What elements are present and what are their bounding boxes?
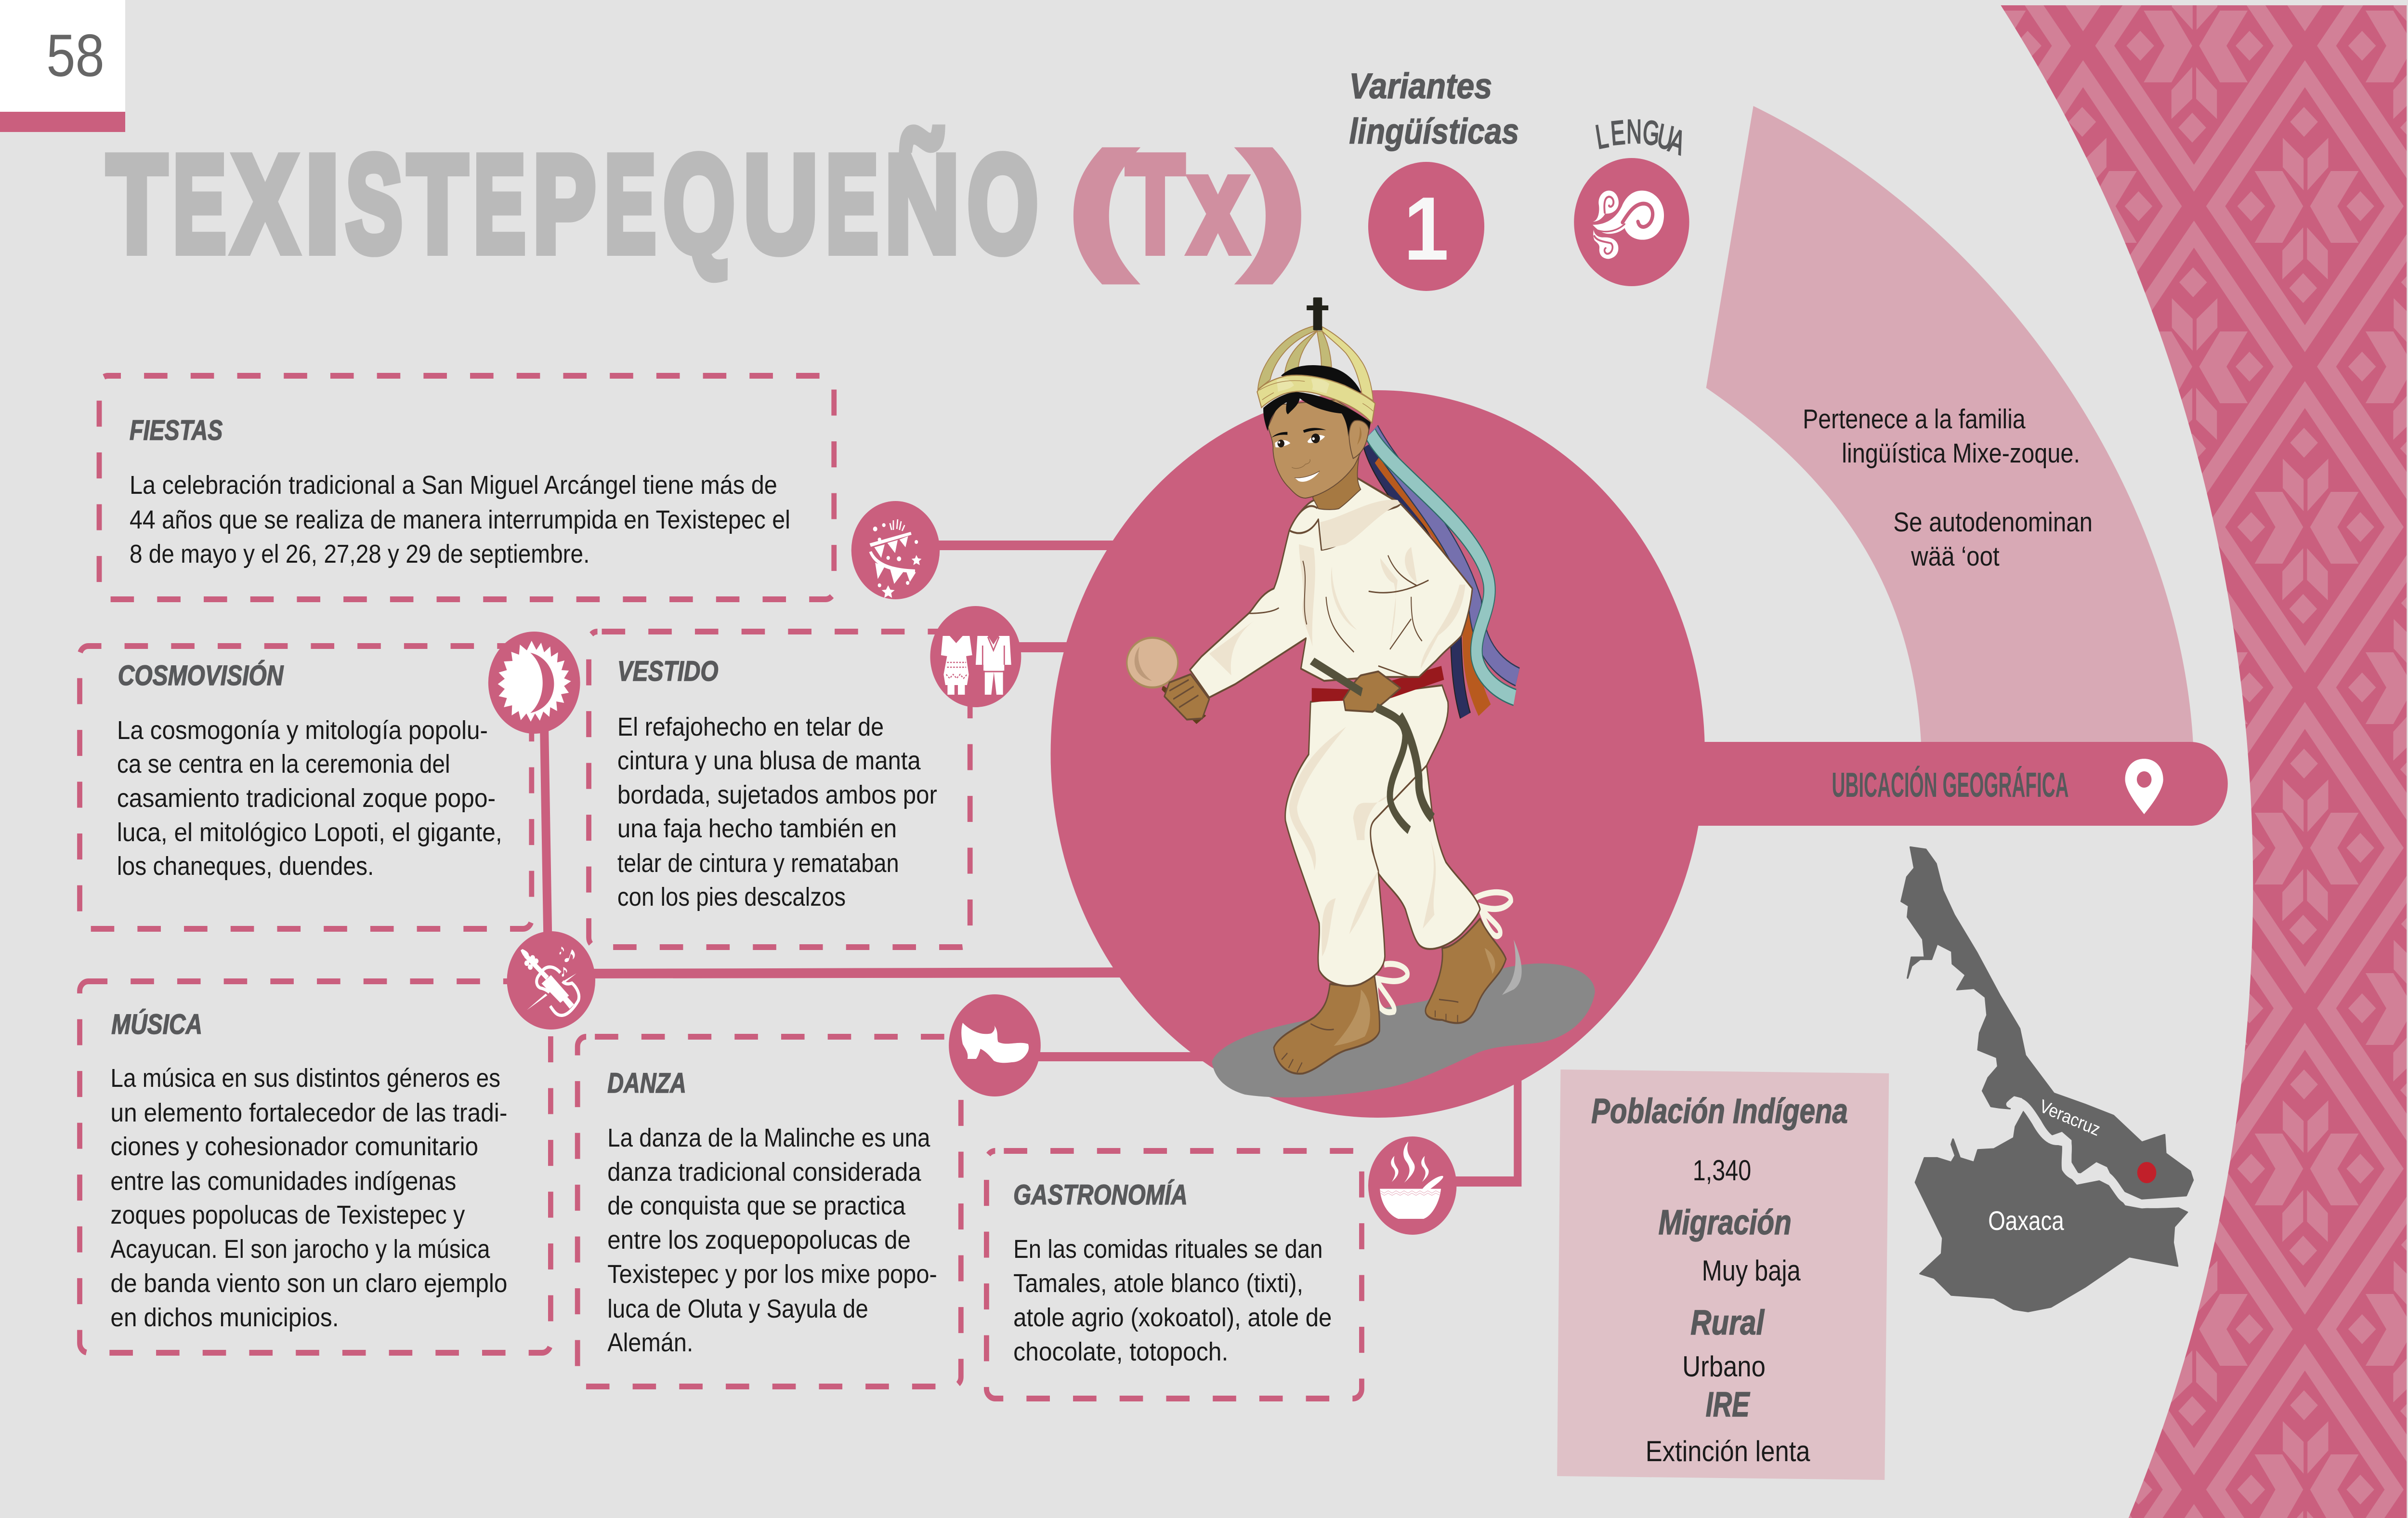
pants and feet — [1274, 685, 1506, 1074]
lengua arced label: N — [1626, 113, 1642, 151]
gastronomía heading: GASTRONOMÍA — [1013, 1179, 1188, 1211]
woven pattern band — [2001, 5, 2407, 1518]
danza text: Texistepec y por los mixe popo- — [607, 1260, 937, 1289]
música heading: MÚSICA — [111, 1008, 202, 1040]
connector lines — [540, 541, 1521, 1187]
cosmovisión text: luca, el mitológico Lopoti, el gigante, — [117, 818, 502, 847]
fiestas text: 44 años que se realiza de manera interrumpida en Texistepec el — [130, 505, 790, 534]
danza heading: DANZA — [607, 1067, 686, 1099]
icon: violin and notes — [507, 931, 595, 1030]
vestido text: cintura y una blusa de manta — [617, 746, 921, 775]
gastronomía text: atole agrio (xokoatol), atole de — [1013, 1303, 1332, 1332]
language code: T — [1126, 127, 1184, 281]
figure: boy dancer — [1127, 297, 1522, 1074]
vestido text: telar de cintura y remataban — [617, 849, 899, 878]
ribbons — [1369, 431, 1518, 716]
panel: cosmovisión — [80, 646, 532, 929]
vestido heading: VESTIDO — [617, 655, 719, 687]
vestido text: bordada, sujetados ambos por — [617, 780, 937, 809]
head with crown — [1257, 297, 1375, 510]
música text: entre las comunidades indígenas — [110, 1167, 456, 1196]
linguistic variants label: Variantes — [1349, 66, 1492, 106]
música text: de banda viento son un claro ejemplo — [110, 1269, 507, 1298]
language family text: Pertenece a la familia — [1803, 404, 2026, 435]
Oaxaca label: Oaxaca — [1988, 1206, 2064, 1236]
icon: map pin — [2125, 759, 2163, 814]
title: E — [173, 127, 226, 281]
icon: sun and moon — [488, 632, 580, 734]
migración value: Muy baja — [1702, 1254, 1801, 1287]
música text: en dichos municipios. — [110, 1303, 339, 1332]
lengua arced label: U — [1654, 117, 1676, 158]
cosmovisión text: La cosmogonía y mitología popolu- — [117, 716, 488, 745]
rural heading: Rural — [1690, 1303, 1765, 1342]
title: O — [968, 127, 1038, 281]
maraca and hand — [1127, 638, 1209, 724]
fiestas heading: FIESTAS — [130, 414, 223, 446]
title: T — [107, 127, 167, 281]
cosmovisión text: ca se centra en la ceremonia del — [117, 750, 450, 779]
gastronomía text: En las comidas rituales se dan — [1013, 1235, 1322, 1264]
lengua arced label: L — [1593, 117, 1610, 156]
icon: fiestas bunting — [851, 501, 940, 599]
danza text: de conquista que se practica — [607, 1191, 906, 1220]
icon: dance shoe — [949, 994, 1041, 1096]
IRE value: Extinción lenta — [1646, 1435, 1810, 1468]
title: T — [408, 127, 468, 281]
ankle ties and motion mark — [1376, 892, 1522, 1012]
gastronomía text: Tamales, atole blanco (tixti), — [1013, 1269, 1303, 1298]
title — [107, 127, 1305, 282]
language family text: lingüística Mixe-zoque. — [1842, 438, 2080, 469]
música text: ciones y cohesionador comunitario — [110, 1132, 478, 1161]
main pink circle — [1051, 390, 1705, 1118]
rural value: Urbano — [1682, 1350, 1766, 1383]
title: U — [744, 127, 818, 281]
floor shadow — [1212, 964, 1595, 1097]
cosmovisión text: los chaneques, duendes. — [117, 852, 374, 881]
fiestas text: La celebración tradicional a San Miguel Arcángel tiene más de — [130, 471, 777, 500]
lengua arced label: G — [1641, 114, 1661, 153]
location label: UBICACIÓN GEOGRÁFICA — [1832, 766, 2069, 805]
cosmovisión text: casamiento tradicional zoque popo- — [117, 784, 496, 813]
title: S — [346, 127, 403, 281]
panel: población data card — [1557, 1069, 1889, 1480]
title: E — [473, 127, 525, 281]
title: I — [304, 127, 340, 281]
vestido text: una faja hecho también en — [617, 814, 897, 843]
locator dot — [2137, 1162, 2156, 1183]
belt — [1312, 666, 1444, 702]
variants number badge: 1 — [1404, 178, 1449, 279]
icon: steaming bowl — [1368, 1136, 1456, 1235]
map: Veracruz and Oaxaca — [1901, 847, 2193, 1312]
panel: gastronomía — [986, 1151, 1361, 1399]
page number tab — [0, 0, 125, 132]
waist cord and hand — [1310, 658, 1432, 830]
linguistic variants label: lingüísticas — [1349, 111, 1519, 151]
title: Q — [663, 127, 735, 281]
language family text: wää ‘oot — [1911, 541, 2000, 572]
title: X — [233, 127, 298, 281]
danza text: luca de Oluta y Sayula de — [607, 1294, 868, 1323]
gastronomía text: chocolate, totopoch. — [1013, 1337, 1228, 1366]
language code: x — [1190, 127, 1247, 281]
lengua arced label — [1593, 113, 1689, 162]
panel: fiestas — [99, 376, 834, 599]
title: P — [533, 127, 596, 281]
migración heading: Migración — [1659, 1203, 1792, 1242]
música text: zoques popolucas de Texistepec y — [110, 1201, 465, 1229]
location bar — [1603, 742, 2228, 826]
vestido text: El refajohecho en telar de — [617, 713, 884, 741]
shirt — [1190, 478, 1472, 698]
población heading: Población Indígena — [1591, 1092, 1848, 1131]
danza text: La danza de la Malinche es una — [607, 1123, 930, 1152]
música text: un elemento fortalecedor de las tradi- — [110, 1098, 507, 1127]
cosmovisión heading: COSMOVISIÓN — [118, 660, 284, 691]
danza text: danza tradicional considerada — [607, 1158, 921, 1187]
fiestas text: 8 de mayo y el 26, 27,28 y 29 de septiembre. — [130, 540, 589, 568]
danza text: entre los zoquepopolucas de — [607, 1226, 911, 1254]
panel: música — [80, 981, 550, 1353]
panel: vestido — [589, 632, 970, 947]
IRE heading: IRE — [1706, 1385, 1750, 1424]
icon: vestido garments — [930, 606, 1021, 707]
lengua arced label: A — [1665, 122, 1689, 162]
música text: La música en sus distintos géneros es — [110, 1064, 500, 1093]
vestido text: con los pies descalzos — [617, 883, 846, 911]
panel: lengua sector — [1706, 106, 2194, 752]
población value: 1,340 — [1693, 1154, 1751, 1187]
variants number badge — [1368, 162, 1484, 291]
title: E — [604, 127, 656, 281]
música text: Acayucan. El son jarocho y la música — [110, 1235, 490, 1264]
title: Ñ — [885, 127, 960, 281]
language code: ( — [1070, 127, 1132, 282]
icon: language swirl — [1574, 158, 1689, 286]
danza text: Alemán. — [607, 1328, 693, 1357]
page number: 58 — [46, 22, 105, 89]
panel: danza — [577, 1037, 961, 1386]
title: E — [826, 127, 878, 281]
lengua arced label: E — [1610, 114, 1626, 153]
Veracruz label: Veracruz — [2037, 1096, 2103, 1140]
language code: ) — [1245, 127, 1305, 282]
language family text: Se autodenominan — [1893, 507, 2093, 538]
